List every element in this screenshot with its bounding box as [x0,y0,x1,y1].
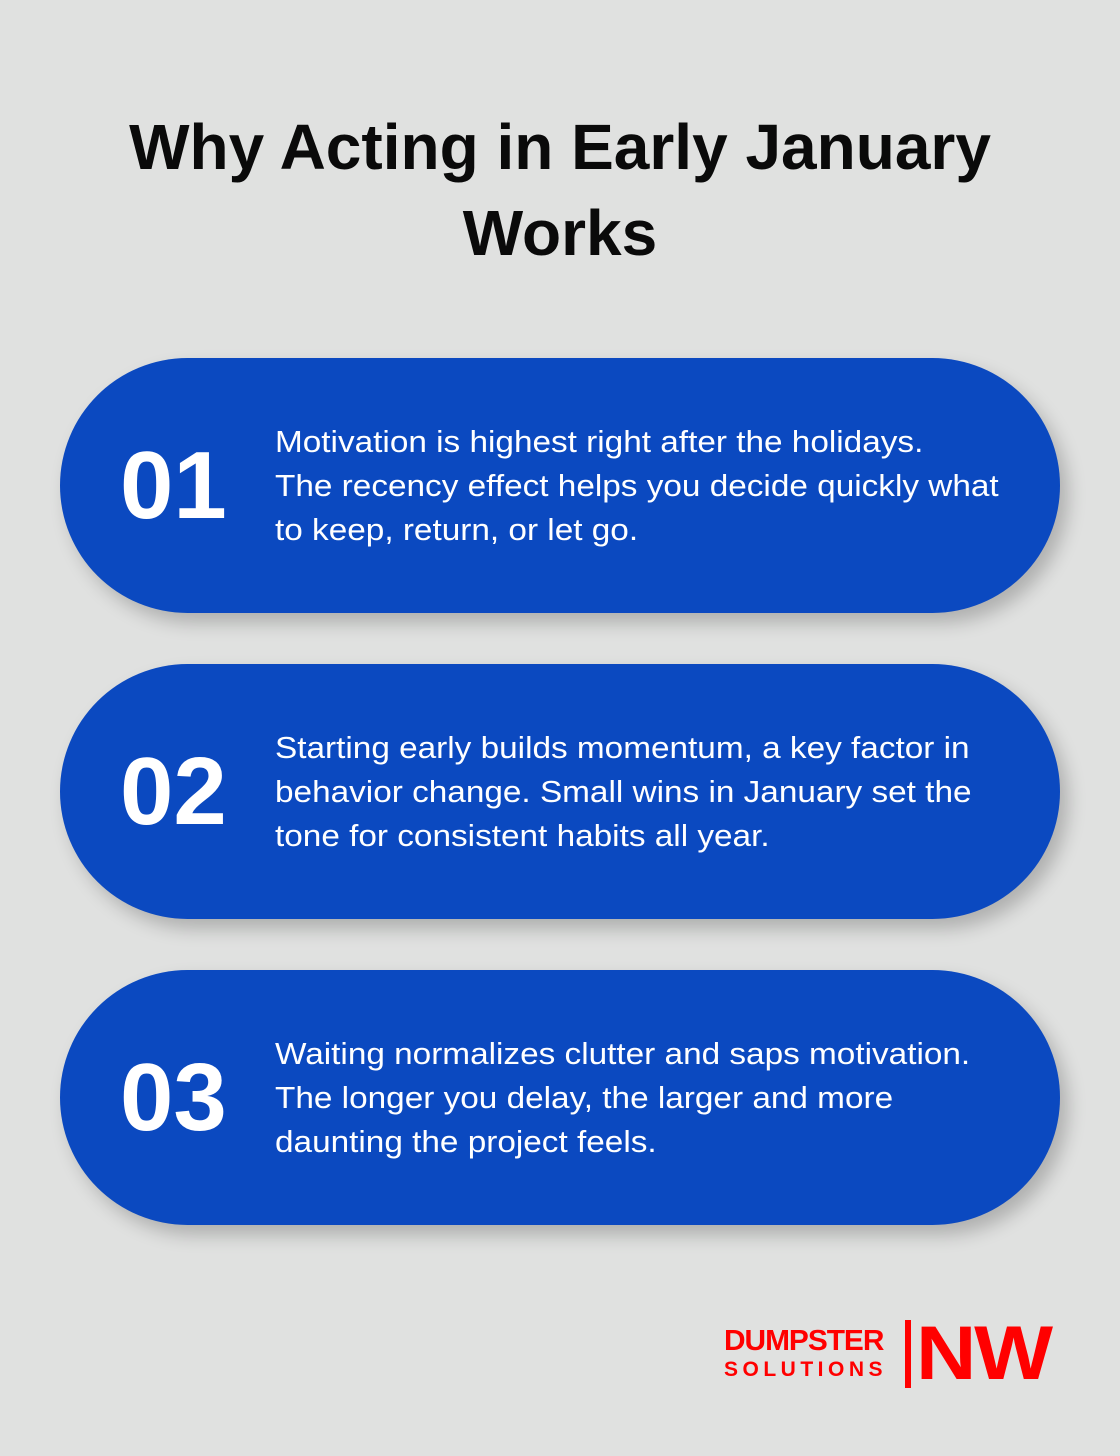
number 03: 03 [120,1044,227,1151]
text 03 [275,1036,970,1159]
title: Why Acting in Early January [129,111,991,183]
text 01 [275,424,999,547]
number 02: 02 [120,738,227,845]
text 01: to keep, return, or let go. [275,512,638,547]
text 01: The recency effect helps you decide quickly what [275,468,999,503]
text 02: behavior change. Small wins in January set the [275,774,972,809]
text 02 [275,730,972,853]
text 03: daunting the project feels. [275,1124,657,1159]
panel: 03 [60,970,1060,1225]
title [129,111,991,269]
panel: 01 [60,358,1060,613]
panel: 02 [60,664,1060,919]
logo: DUMPSTER [724,1325,883,1357]
logo: SOLUTIONS [724,1358,887,1381]
text 03: Waiting normalizes clutter and saps motivation. [275,1036,970,1071]
logo [724,1311,1053,1396]
title: Works [463,197,657,269]
number 01: 01 [120,432,227,539]
text 02: tone for consistent habits all year. [275,818,770,853]
text 02: Starting early builds momentum, a key factor in [275,730,970,765]
text 01: Motivation is highest right after the holidays. [275,424,923,459]
logo: NW [916,1311,1051,1396]
text 03: The longer you delay, the larger and more [275,1080,893,1115]
